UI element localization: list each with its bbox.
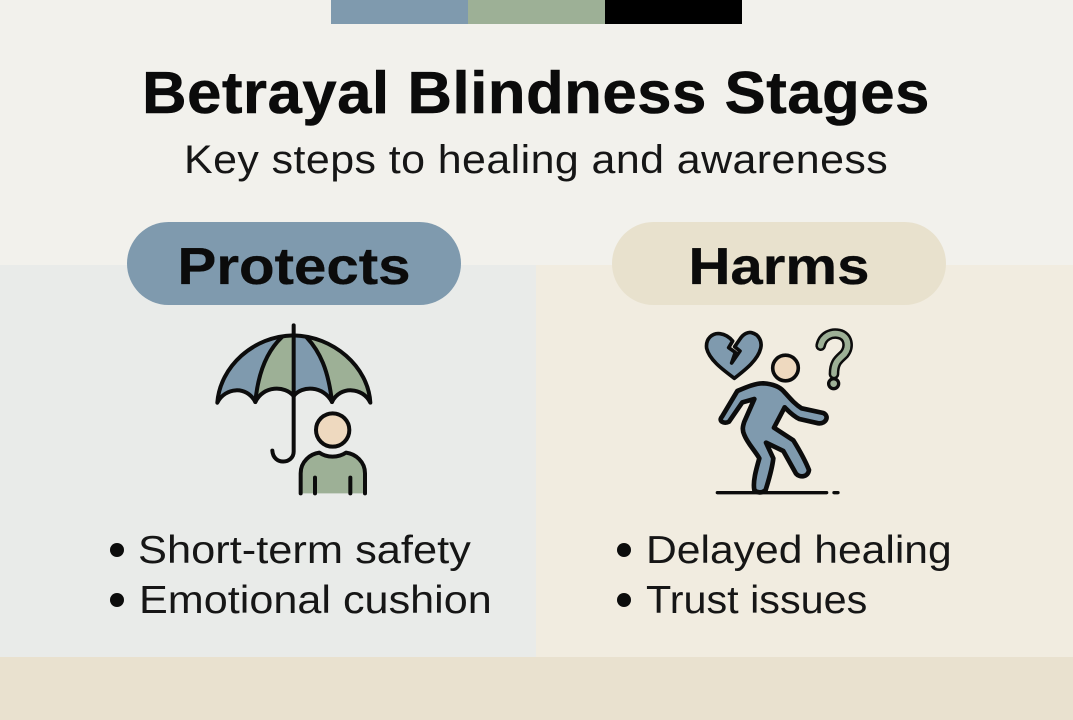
icon: ground line [717, 488, 838, 498]
heading pill: protects: Protects [177, 238, 411, 296]
icon: question mark [821, 334, 848, 389]
icon: body [717, 383, 838, 493]
list item: Trust issues [646, 579, 867, 622]
subtitle: Key steps to healing and awareness [184, 138, 889, 182]
icon: stumbling figure with broken heart and question mark [704, 328, 853, 495]
icon: broken heart [707, 332, 761, 378]
list: harms [617, 529, 952, 622]
heading pill: harms: Harms [689, 238, 869, 296]
bullet [617, 593, 631, 607]
list item: Short-term safety [138, 529, 471, 572]
panel: protects background [0, 265, 536, 657]
colour swatch bar [331, 0, 742, 24]
icon: umbrella and person [215, 323, 372, 496]
list item: Delayed healing [646, 529, 952, 572]
list: protects [110, 529, 492, 622]
title: Betrayal Blindness Stages [143, 60, 930, 126]
list item: Emotional cushion [139, 579, 492, 622]
heading pill: harms [612, 222, 946, 305]
icon: head [773, 355, 798, 381]
panel: harms background [536, 265, 1073, 657]
heading pill: protects [127, 222, 461, 305]
bullet [110, 593, 124, 607]
footer band [0, 657, 1073, 720]
bullet [110, 543, 124, 557]
bullet [617, 543, 631, 557]
